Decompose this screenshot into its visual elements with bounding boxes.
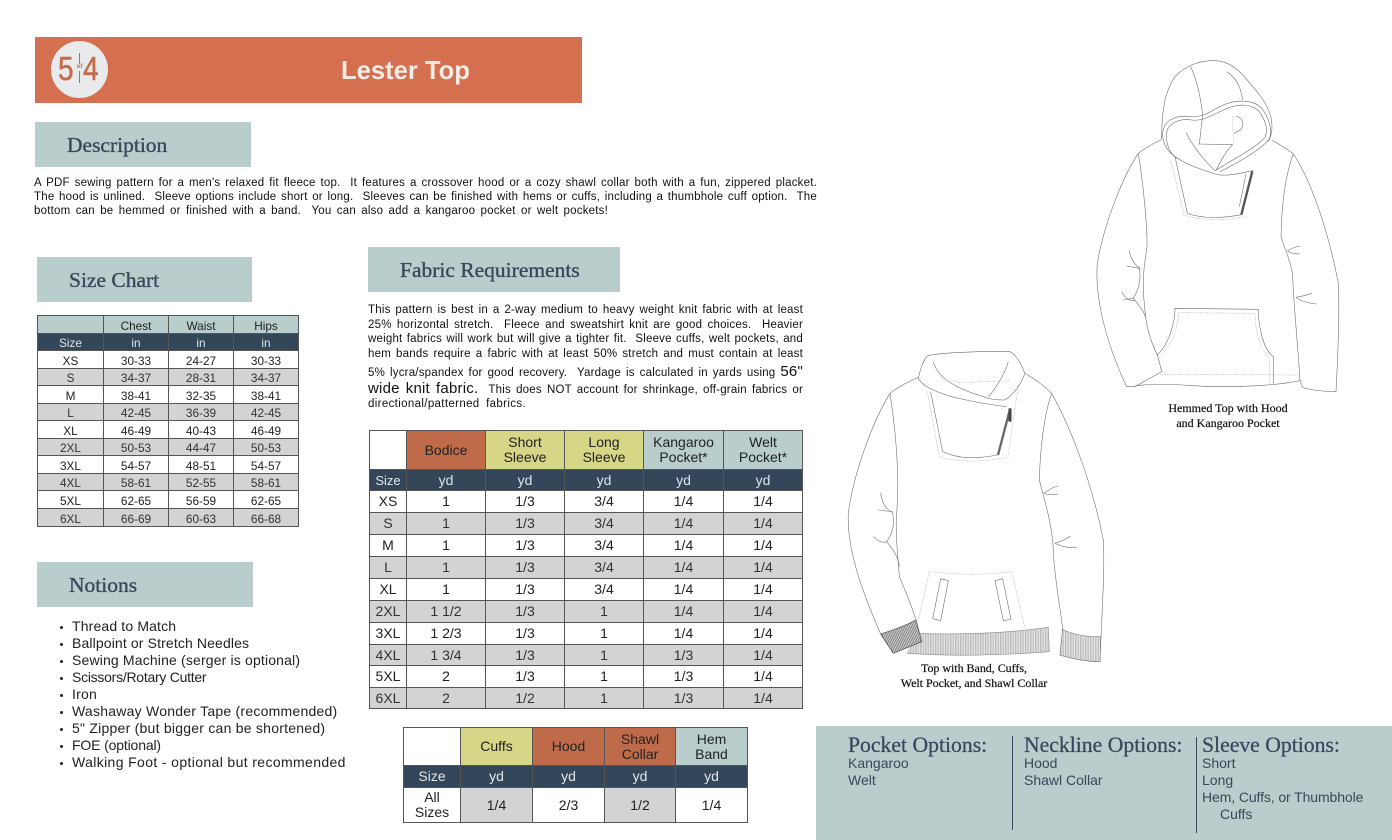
fabric requirements table: 1/4	[753, 668, 773, 684]
accessories fabric table: 1/4	[487, 796, 506, 812]
fabric requirements table: Sleeve	[504, 449, 546, 465]
fabric requirements table: S	[383, 515, 393, 531]
size chart table: 42-45	[251, 406, 281, 420]
fabric requirements table: Bodice	[425, 442, 467, 458]
size chart table: in	[196, 336, 206, 350]
size chart table: 30-33	[121, 354, 151, 368]
size chart table: 36-39	[186, 406, 216, 420]
sleeve options	[1202, 733, 1363, 822]
size chart table: 6XL	[60, 512, 81, 526]
fabric requirements table: 3/4	[594, 493, 614, 509]
fabric requirements table: 1/3	[515, 646, 535, 662]
fabric requirements table: 1 1/2	[430, 603, 462, 619]
size chart table: 3XL	[60, 458, 81, 472]
size chart table: 58-61	[251, 476, 281, 490]
notions list: Scissors/Rotary Cutter	[72, 669, 206, 685]
size chart table: 5XL	[60, 494, 81, 508]
fabric requirements table: 1	[442, 537, 450, 553]
size chart table: 54-57	[121, 458, 151, 472]
caption: hooded top: and Kangaroo Pocket	[1176, 416, 1280, 430]
fabric requirements table: 2XL	[376, 603, 400, 619]
fabric requirements table: 1/3	[515, 625, 535, 641]
size chart table: 38-41	[251, 388, 281, 402]
size chart table: 34-37	[251, 371, 281, 385]
fabric requirements table: 3/4	[594, 581, 614, 597]
fabric requirements table: 1	[442, 493, 450, 509]
fabric requirements table: 1	[442, 515, 450, 531]
size chart table: 46-49	[251, 424, 281, 438]
size chart table: 32-35	[186, 388, 216, 402]
size chart table: 44-47	[186, 441, 216, 455]
fabric requirements table: 1/3	[515, 581, 535, 597]
fabric requirements table: 1/4	[674, 559, 693, 575]
accessories fabric table: Cuffs	[480, 738, 513, 754]
size chart table: 60-63	[186, 512, 216, 526]
size chart table: in	[131, 336, 141, 350]
fabric requirements table: 1	[442, 559, 450, 575]
heading: notions	[37, 562, 253, 607]
heading: description: Description	[67, 133, 167, 157]
size chart table: 42-45	[121, 406, 151, 420]
pocket options: Pocket Options:	[848, 733, 987, 757]
text block: fabric requirements: 5% lycra/spandex for good recovery. Yardage is calculated in yards using 56"	[368, 363, 803, 380]
accessories fabric table: yd	[633, 768, 647, 784]
text block: description: bottom can be hemmed or finished with a band. You can also add a kangaroo pocket or welt pockets!	[34, 205, 608, 217]
neckline options: Hood	[1024, 755, 1057, 771]
accessories fabric table: yd	[561, 768, 576, 784]
options panel	[816, 726, 1392, 840]
heading: fabric requirements: Fabric Requirements	[400, 258, 580, 282]
fabric requirements table: 1/3	[515, 537, 535, 553]
accessories fabric table: 2/3	[559, 796, 578, 812]
fabric requirements table: 3XL	[376, 625, 400, 641]
fabric requirements table: 4XL	[376, 646, 400, 662]
sleeve options: Short	[1202, 755, 1235, 771]
fabric requirements table: 2	[442, 690, 450, 706]
size chart table: 52-55	[186, 476, 216, 490]
fabric requirements table	[369, 430, 803, 709]
fabric requirements table: 1	[600, 603, 608, 619]
fabric requirements table: 1/2	[515, 690, 535, 706]
notions list: Washaway Wonder Tape (recommended)	[72, 703, 337, 719]
fabric requirements table: 1/4	[753, 690, 773, 706]
caption: hooded top	[1168, 401, 1288, 430]
accessories fabric table: Hood	[552, 738, 585, 754]
size chart table: 56-59	[186, 494, 216, 508]
text block: fabric requirements: weight fabrics will work but will give a tighter fit. Sleeve cuffs, welt pockets, and	[368, 333, 803, 345]
size chart table: L	[67, 406, 74, 420]
notions list: Sewing Machine (serger is optional)	[72, 652, 300, 668]
text block: fabric requirements: directional/patterned fabrics.	[368, 398, 526, 410]
size chart table: Hips	[254, 318, 278, 332]
fabric requirements table: 3/4	[594, 537, 614, 553]
heading: size chart: Size Chart	[69, 268, 159, 292]
notions list: Walking Foot - optional but recommended	[72, 754, 346, 770]
fabric requirements table: yd	[439, 472, 453, 488]
fabric requirements table: 1/4	[753, 493, 773, 509]
size chart table: 40-43	[186, 424, 216, 438]
size chart table: XS	[63, 354, 78, 368]
notions list: Thread to Match	[72, 618, 176, 634]
size chart table: 66-68	[251, 512, 281, 526]
fabric requirements table: yd	[676, 472, 691, 488]
fabric requirements table: 1/3	[515, 515, 535, 531]
notions list: 5" Zipper (but bigger can be shortened)	[72, 720, 325, 736]
size chart table: S	[67, 371, 74, 385]
fabric requirements table: 1/4	[753, 581, 773, 597]
title banner	[35, 37, 582, 103]
fabric requirements table: Short	[508, 434, 542, 450]
pocket options: Kangaroo	[848, 755, 909, 771]
heading: description	[35, 122, 251, 167]
sleeve options: Sleeve Options:	[1202, 733, 1340, 757]
accessories fabric table: All	[424, 789, 440, 805]
fabric requirements table: 1	[600, 646, 608, 662]
fabric requirements table: L	[384, 559, 392, 575]
accessories fabric table	[403, 727, 748, 823]
heading: fabric requirements	[368, 247, 620, 292]
size chart table: 4XL	[60, 476, 81, 490]
fabric requirements table: 1/4	[753, 625, 773, 641]
notions list: FOE (optional)	[72, 737, 161, 753]
heading: notions: Notions	[69, 573, 137, 597]
size chart table: 28-31	[186, 371, 216, 385]
notions list	[60, 618, 346, 770]
caption: shawl collar top	[900, 661, 1048, 690]
fabric requirements table: 1/4	[753, 537, 773, 553]
size chart table: 34-37	[121, 371, 151, 385]
fabric requirements table: 1/3	[515, 559, 535, 575]
fabric requirements table: yd	[597, 472, 611, 488]
logo: 5 of 4 badge	[51, 41, 108, 98]
size chart table: 50-53	[251, 441, 281, 455]
size chart table: 62-65	[121, 494, 151, 508]
text block: fabric requirements: 25% horizontal stretch. Fleece and sweatshirt knit are good choices. Heavier	[368, 319, 803, 331]
fabric requirements table: 1/4	[753, 515, 773, 531]
accessories fabric table: Size	[418, 768, 446, 784]
fabric requirements table: Long	[588, 434, 620, 450]
fabric requirements table: Welt	[749, 434, 777, 450]
text block: fabric requirements: wide knit fabric. This does NOT account for shrinkage, off-grain fabrics or	[368, 380, 803, 397]
heading: size chart	[37, 257, 252, 302]
fabric requirements table: 1/3	[674, 646, 693, 662]
accessories fabric table: Shawl	[621, 730, 659, 746]
sleeve options: Cuffs	[1220, 806, 1252, 822]
fabric requirements table: XS	[379, 493, 397, 509]
size chart table: 2XL	[60, 441, 81, 455]
fabric requirements table: 1/4	[674, 603, 693, 619]
size chart table: 48-51	[186, 458, 216, 472]
fabric requirements table: 5XL	[376, 668, 400, 684]
fabric requirements table: 1/3	[674, 690, 693, 706]
fabric requirements table: 1/4	[674, 493, 693, 509]
fabric requirements table: 3/4	[594, 515, 614, 531]
accessories fabric table: 1/2	[630, 796, 650, 812]
text block: fabric requirements: This pattern is best in a 2-way medium to heavy weight knit fabric with at least	[368, 304, 803, 316]
size chart table: 24-27	[186, 354, 216, 368]
fabric requirements table: 1 3/4	[430, 646, 462, 662]
pocket options: Welt	[848, 772, 876, 788]
notions list: Ballpoint or Stretch Needles	[72, 635, 249, 651]
neckline options	[1024, 733, 1182, 788]
size chart table	[37, 315, 299, 527]
fabric requirements table: 1/3	[674, 668, 693, 684]
fabric requirements table: Kangaroo	[653, 434, 714, 450]
fabric requirements table: 1/4	[674, 625, 693, 641]
size chart table: Size	[59, 336, 82, 350]
size chart table: M	[66, 388, 75, 402]
fabric requirements table: 1/3	[515, 603, 535, 619]
shawl collar top drawing	[848, 351, 1104, 662]
fabric requirements table: 1	[600, 625, 608, 641]
fabric requirements table: Sleeve	[583, 449, 625, 465]
accessories fabric table: yd	[489, 768, 504, 784]
pocket options	[848, 733, 987, 788]
fabric requirements table: 1/4	[674, 581, 693, 597]
accessories fabric table: Collar	[622, 746, 658, 762]
size chart table: Chest	[121, 318, 151, 332]
size chart table: 62-65	[251, 494, 281, 508]
text block: fabric requirements	[368, 304, 803, 410]
size chart table: 46-49	[121, 424, 151, 438]
fabric requirements table: 1	[600, 668, 608, 684]
neckline options: Neckline Options:	[1024, 733, 1182, 757]
fabric requirements table: yd	[518, 472, 532, 488]
fabric requirements table: Size	[375, 472, 401, 488]
fabric requirements table: Pocket*	[739, 449, 787, 465]
accessories fabric table: 1/4	[702, 796, 721, 812]
fabric requirements table: 6XL	[376, 690, 400, 706]
fabric requirements table: 1	[600, 690, 608, 706]
logo: 5 of 4 badge: of	[77, 64, 82, 70]
fabric requirements table: yd	[756, 472, 770, 488]
title text: Lester Top	[341, 57, 470, 85]
text block: description: A PDF sewing pattern for a men's relaxed fit fleece top. It features a crossover hood or a cozy shawl collar both with a fun, zippered placket.	[34, 177, 817, 189]
fabric requirements table: 1/3	[515, 493, 535, 509]
fabric requirements table: XL	[379, 581, 397, 597]
fabric requirements table: M	[382, 537, 394, 553]
size chart table: XL	[63, 424, 78, 438]
size chart table: Waist	[186, 318, 216, 332]
fabric requirements table: 1 2/3	[430, 625, 462, 641]
caption: shawl collar top: Top with Band, Cuffs,	[921, 661, 1027, 675]
fabric requirements table: 1/4	[753, 559, 773, 575]
fabric requirements table: 1/4	[753, 646, 773, 662]
size chart table: 54-57	[251, 458, 281, 472]
accessories fabric table: Band	[695, 746, 728, 762]
text block: description: The hood is unlined. Sleeve options include short or long. Sleeves can be finished with hems or cuffs, including a thumbhole cuff option. The	[34, 191, 817, 203]
logo: 5 of 4 badge: 4	[83, 50, 99, 87]
logo: 5 of 4 badge: 5	[58, 50, 74, 87]
fabric requirements table: 1/4	[674, 537, 693, 553]
notions list: Iron	[72, 686, 97, 702]
size chart table: 30-33	[251, 354, 281, 368]
accessories fabric table: yd	[704, 768, 719, 784]
size chart table: 66-69	[121, 512, 151, 526]
text block: fabric requirements: hem bands require a fabric with at least 50% stretch and must contain at least	[368, 348, 803, 360]
size chart table: 50-53	[121, 441, 151, 455]
text block: description	[34, 177, 817, 217]
fabric requirements table: 1/4	[753, 603, 773, 619]
accessories fabric table: Sizes	[415, 804, 449, 820]
size chart table: 58-61	[121, 476, 151, 490]
fabric requirements table: 1/4	[674, 515, 693, 531]
size chart table: 38-41	[121, 388, 151, 402]
hooded top drawing	[1097, 61, 1339, 392]
caption: shawl collar top: Welt Pocket, and Shawl Collar	[901, 676, 1047, 690]
fabric requirements table: 2	[442, 668, 450, 684]
fabric requirements table: Pocket*	[659, 449, 708, 465]
accessories fabric table: Hem	[697, 730, 726, 746]
caption: hooded top: Hemmed Top with Hood	[1168, 401, 1288, 415]
fabric requirements table: 1/3	[515, 668, 535, 684]
neckline options: Shawl Collar	[1024, 772, 1103, 788]
fabric requirements table: 1	[442, 581, 450, 597]
sleeve options: Hem, Cuffs, or Thumbhole	[1202, 789, 1363, 805]
sleeve options: Long	[1202, 772, 1233, 788]
size chart table: in	[261, 336, 271, 350]
fabric requirements table: 3/4	[594, 559, 614, 575]
